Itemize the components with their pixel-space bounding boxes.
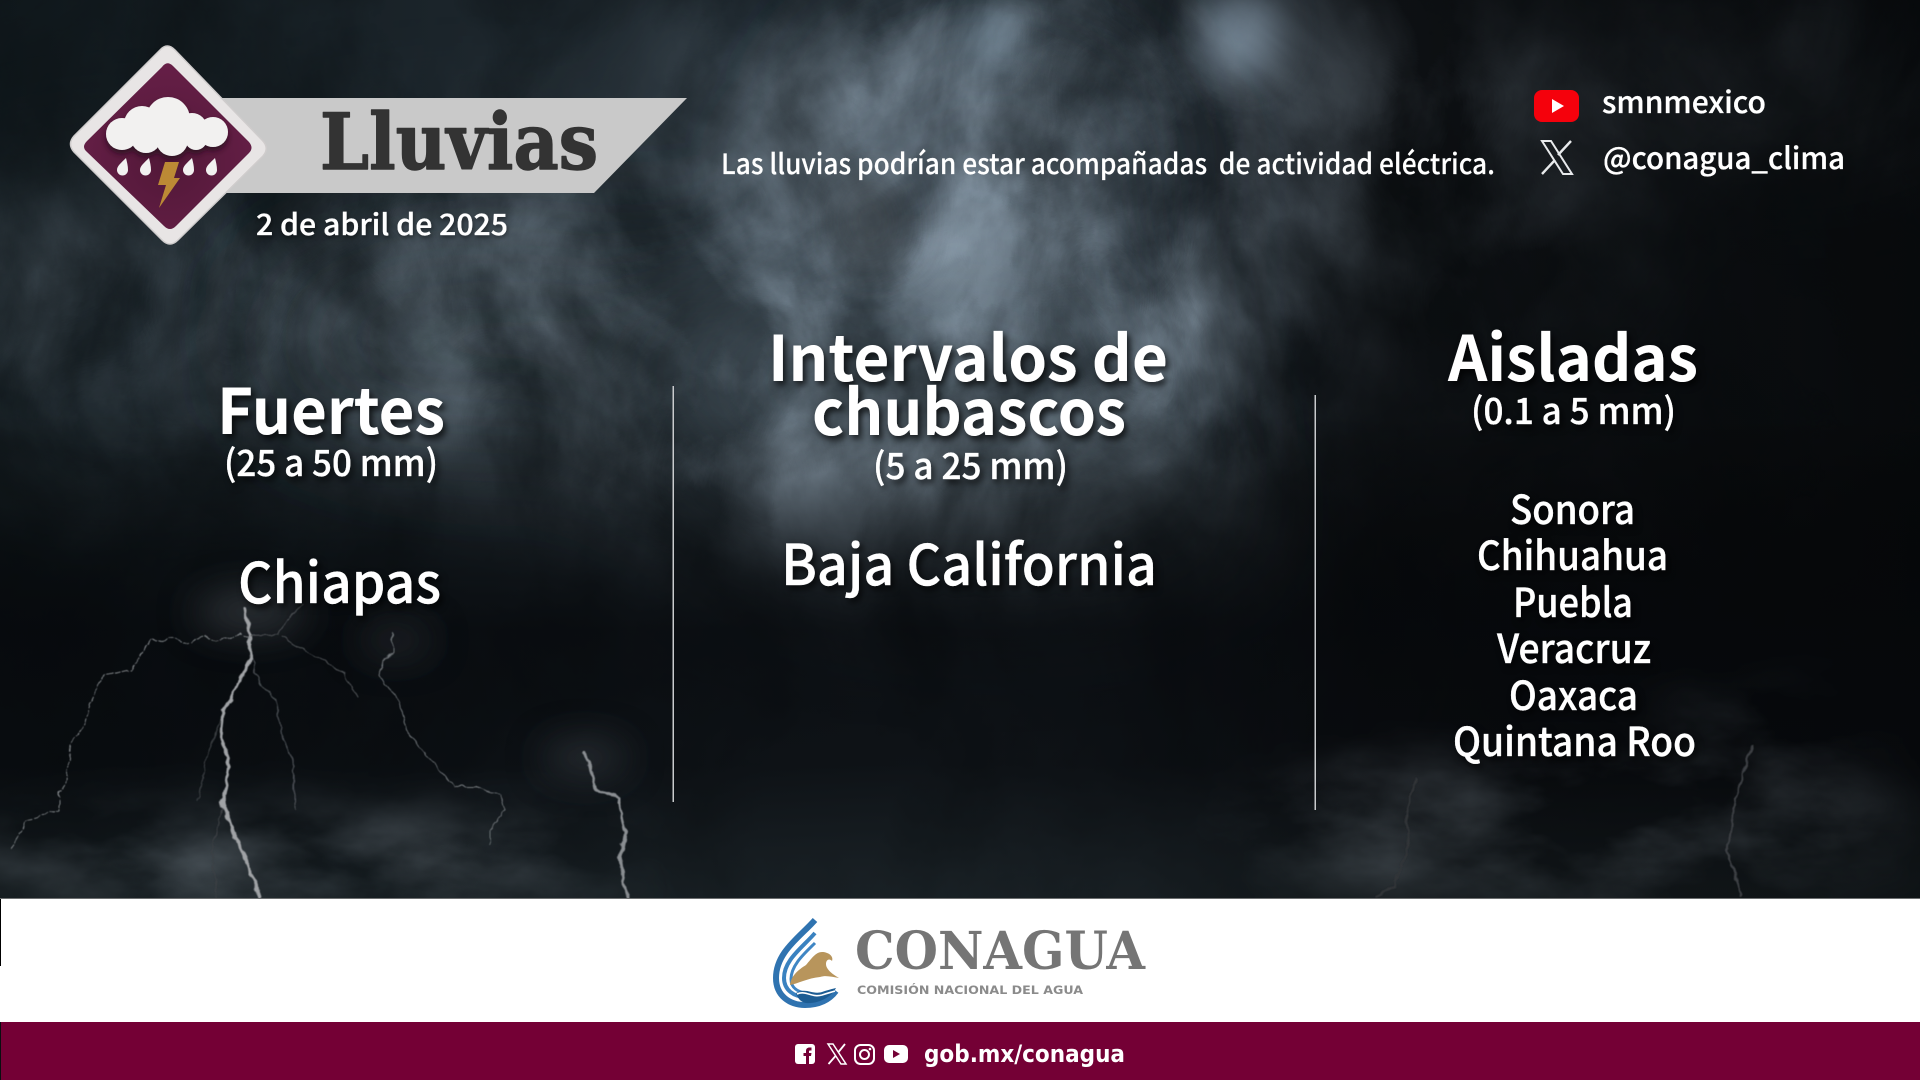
icon: youtube	[1534, 90, 1579, 122]
vertical divider left	[672, 386, 674, 802]
website: gob.mx/conagua	[924, 1040, 1125, 1068]
icon: instagram	[855, 1045, 874, 1064]
range: (25 a 50 mm)	[224, 435, 438, 487]
footer white band	[0, 898, 1920, 1022]
cloud	[106, 97, 228, 156]
banner shape	[220, 98, 687, 193]
states list: Quintana Roo	[1453, 710, 1696, 768]
social: X	[1542, 134, 1845, 178]
wordmark: CONAGUA	[855, 921, 1146, 982]
range: (0.1 a 5 mm)	[1471, 383, 1676, 435]
lightning bolts	[11, 605, 1752, 897]
icon: X	[828, 1044, 846, 1064]
social: youtube	[1534, 78, 1766, 122]
heading: Aisladas	[1447, 309, 1698, 400]
youtube handle: smnmexico	[1602, 78, 1766, 122]
range: (5 a 25 mm)	[873, 438, 1068, 490]
column: Intervalos de chubascos	[768, 309, 1168, 602]
states list: Sonora	[1510, 478, 1635, 536]
states list: Chihuahua	[1477, 524, 1668, 582]
note about electrical activity: Las lluvias podrían estar acompañadas de actividad eléctrica.	[721, 143, 1495, 183]
banner title: Lluvias	[320, 97, 598, 188]
icon: youtube	[884, 1045, 908, 1063]
states list: Oaxaca	[1509, 664, 1638, 722]
states list: Puebla	[1513, 571, 1633, 629]
lightning bolt	[158, 162, 180, 208]
badge inner diamond	[84, 63, 252, 229]
X handle: @conagua_clima	[1603, 134, 1845, 178]
badge frame	[70, 46, 266, 244]
icon: facebook	[795, 1044, 815, 1064]
header banner	[220, 97, 687, 193]
states list	[1453, 478, 1696, 768]
heading line two: chubascos	[812, 363, 1126, 454]
heading: Fuertes	[217, 362, 445, 453]
rain drops	[117, 158, 217, 176]
column: Aisladas	[1447, 309, 1698, 768]
states list: Veracruz	[1496, 617, 1651, 675]
tagline: COMISIÓN NACIONAL DEL AGUA	[857, 982, 1083, 997]
icon: rain badge	[70, 46, 266, 244]
heading line one: Intervalos de	[768, 309, 1168, 400]
date: 2 de abril de 2025	[256, 202, 508, 244]
icon: water drop and eagle	[776, 920, 839, 1005]
state: Baja California	[781, 521, 1157, 602]
vertical divider right	[1314, 395, 1316, 810]
logo: CONAGUA	[776, 920, 1146, 1005]
state: Chiapas	[238, 539, 441, 620]
icon: X	[1542, 141, 1572, 174]
column: Fuertes	[217, 362, 445, 620]
footer maroon band	[1, 1022, 1920, 1080]
